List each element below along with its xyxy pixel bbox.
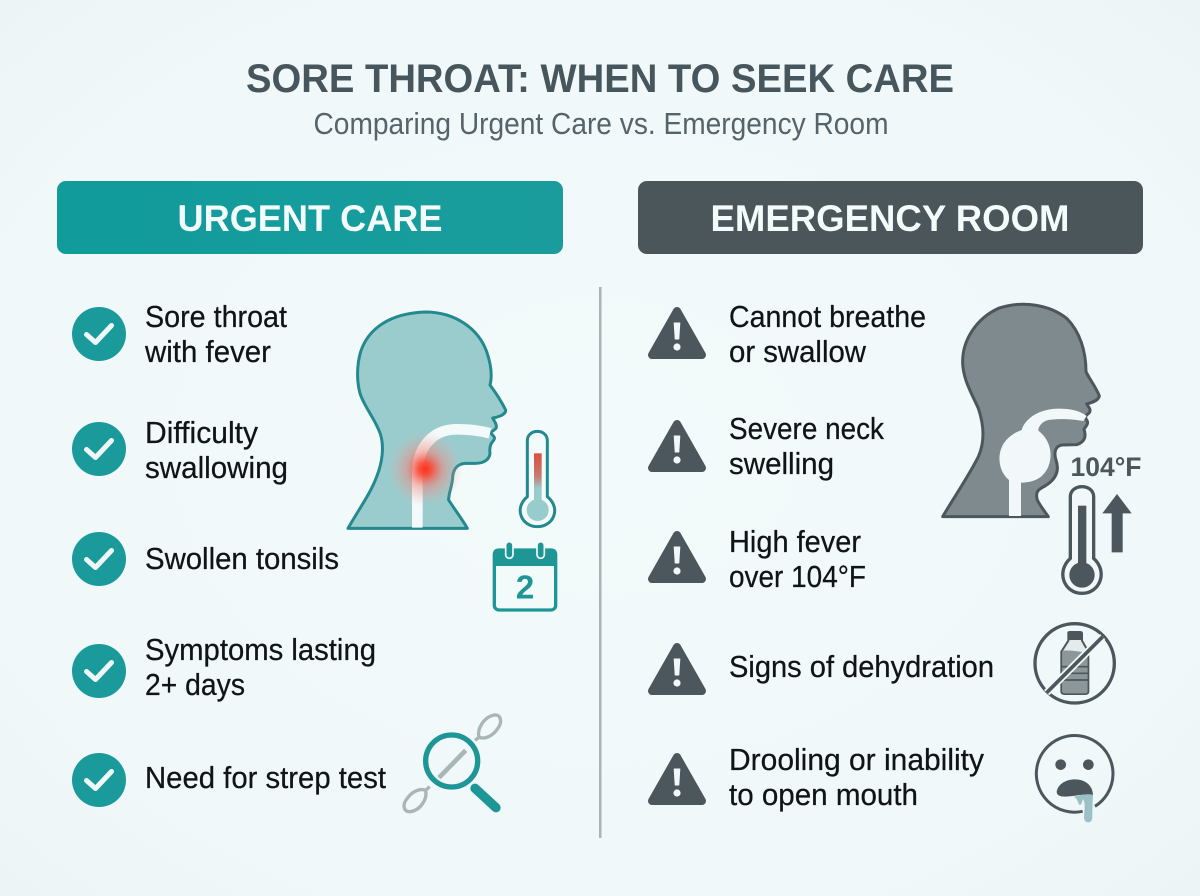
item: cannot breathe or swallow: or swallow [729,334,867,369]
item: sore throat with fever: with fever [144,334,271,369]
item: sore throat with fever [72,299,287,369]
panel: emergency room header: EMERGENCY ROOM [710,198,1070,239]
icon: gray head profile with swollen neck [943,304,1099,517]
panel: urgent care header [57,181,563,254]
item: sore throat with fever: Sore throat [145,299,287,334]
item: severe neck swelling: Severe neck [729,411,884,446]
item: symptoms lasting 2+ days: Symptoms lasting [145,632,376,667]
item: swollen tonsils: Swollen tonsils [145,541,339,576]
item: difficulty swallowing [72,415,288,485]
item: severe neck swelling: swelling [729,446,834,481]
item: symptoms lasting 2+ days [72,632,376,702]
icon: no water bottle [1035,624,1114,703]
item: cannot breathe or swallow: Cannot breathe [729,299,926,334]
icon: drooling face [1036,736,1113,822]
item: high fever over 104F: High fever [729,524,861,559]
icon: calendar with number 2: 2 [516,569,534,606]
subtitle: Comparing Urgent Care vs. Emergency Room [314,106,888,141]
panel: emergency room header [638,181,1143,254]
item: signs of dehydration: Signs of dehydration [729,649,994,684]
icon: calendar with number 2 [493,542,557,610]
label: 104F: 104°F [1070,452,1142,482]
item: drooling or inability to open mouth [652,742,984,812]
item: symptoms lasting 2+ days: 2+ days [145,667,245,702]
item: high fever over 104F: over 104°F [729,559,866,594]
item: need for strep test: Need for strep test [145,760,386,795]
item: difficulty swallowing: Difficulty [145,415,258,450]
icon: teal head profile with inflamed throat [348,312,506,528]
item: difficulty swallowing: swallowing [145,450,288,485]
icon: magnifier with strep swab [404,715,501,812]
panel: urgent care header: URGENT CARE [178,198,442,239]
item: severe neck swelling [652,411,884,481]
item: signs of dehydration [652,647,994,691]
item: drooling or inability to open mouth: to open mouth [729,777,918,812]
item: need for strep test [72,753,386,807]
icon: gray thermometer with up arrow [1063,487,1132,593]
item: drooling or inability to open mouth: Drooling or inability [729,742,984,777]
panel: emergency room list [652,299,994,812]
panel: urgent care list [72,299,386,807]
title: SORE THROAT: WHEN TO SEEK CARE [246,57,954,101]
item: cannot breathe or swallow [652,299,926,369]
item: high fever over 104F [652,524,866,594]
item: swollen tonsils [72,532,339,586]
icon: thermometer with fever [520,431,555,527]
